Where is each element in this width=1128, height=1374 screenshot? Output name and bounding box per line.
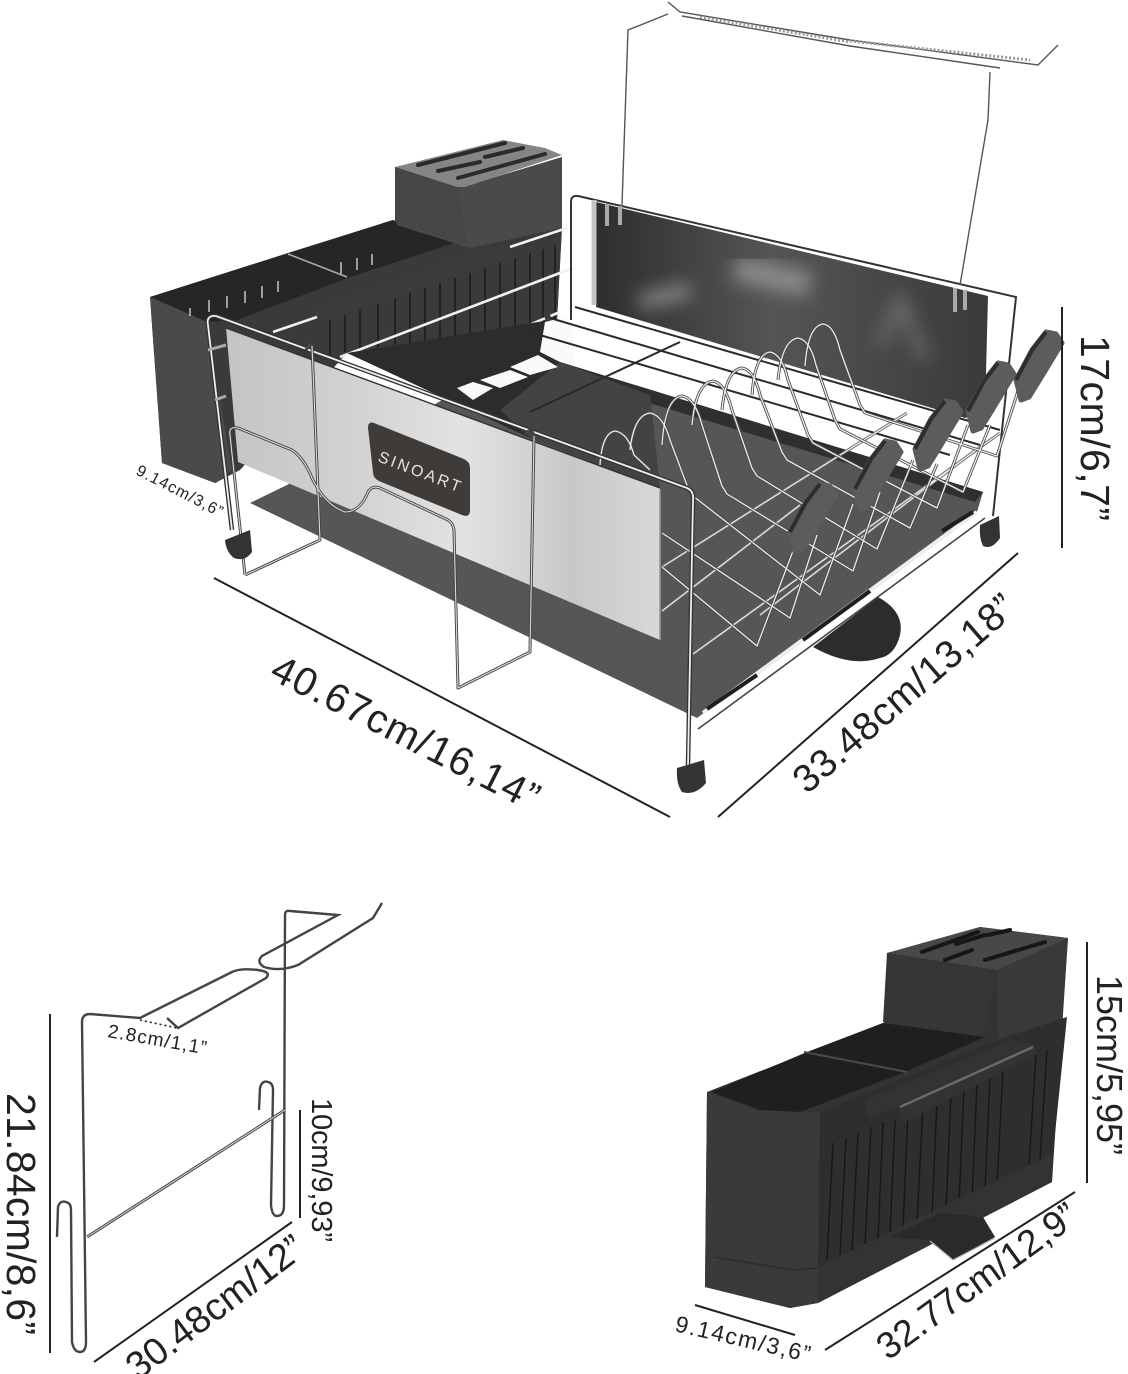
white floor gaps bbox=[457, 315, 573, 400]
dimension: small holder depth: 9.14cm/3,6” bbox=[133, 462, 226, 521]
drain tab bbox=[890, 1213, 995, 1260]
tray rim wire bbox=[698, 518, 985, 729]
dimension: caddy depth: 9.14cm/3,6” bbox=[673, 1311, 813, 1367]
dimension: rack width: 33.48cm/13,18” bbox=[785, 586, 1024, 802]
plate rack rails bbox=[662, 413, 1000, 654]
compartments bbox=[712, 1023, 985, 1112]
utensil caddy product bbox=[705, 927, 1068, 1308]
expanded top hanger bbox=[622, 2, 1058, 285]
towel bar bbox=[311, 242, 510, 320]
cutting board holder bbox=[230, 345, 534, 688]
drain spout bbox=[813, 597, 901, 661]
main dish rack product bbox=[150, 2, 1062, 793]
front stainless panel bbox=[226, 328, 660, 640]
brand badge bbox=[368, 423, 470, 516]
dimension: caddy length: 32.77cm/12,9” bbox=[869, 1194, 1085, 1367]
knife block bbox=[395, 140, 562, 248]
caddy towel bar bbox=[865, 1040, 1035, 1123]
chrome side rails bbox=[273, 228, 573, 378]
knife slots bbox=[887, 927, 1068, 970]
back stainless panel bbox=[571, 196, 1016, 516]
plate wire zigzags bbox=[600, 324, 1018, 646]
dimension: rack width bbox=[718, 553, 1024, 817]
ribbed side bbox=[818, 1017, 1067, 1303]
brand name: SINOART bbox=[376, 449, 463, 496]
plate rack handles bbox=[790, 332, 1062, 552]
dimension: rack height: 17cm/6,7” bbox=[1072, 335, 1118, 521]
dimension: rack length: 40.67cm/16,14” bbox=[264, 647, 547, 820]
rack floor bars bbox=[530, 307, 1000, 455]
utensil holder bbox=[150, 220, 562, 483]
caddy body bbox=[705, 927, 1068, 1308]
rack feet bbox=[225, 516, 1000, 793]
dimension: hanger gap: 2.8cm/1,1” bbox=[106, 1021, 208, 1059]
left face bbox=[705, 1092, 820, 1308]
dimension: rack length bbox=[214, 578, 670, 820]
chrome frame bbox=[208, 316, 693, 765]
dimension: hook length: 10cm/9,93” bbox=[305, 1098, 337, 1242]
wire hanger product bbox=[57, 903, 382, 1352]
drip tray bbox=[250, 315, 983, 718]
